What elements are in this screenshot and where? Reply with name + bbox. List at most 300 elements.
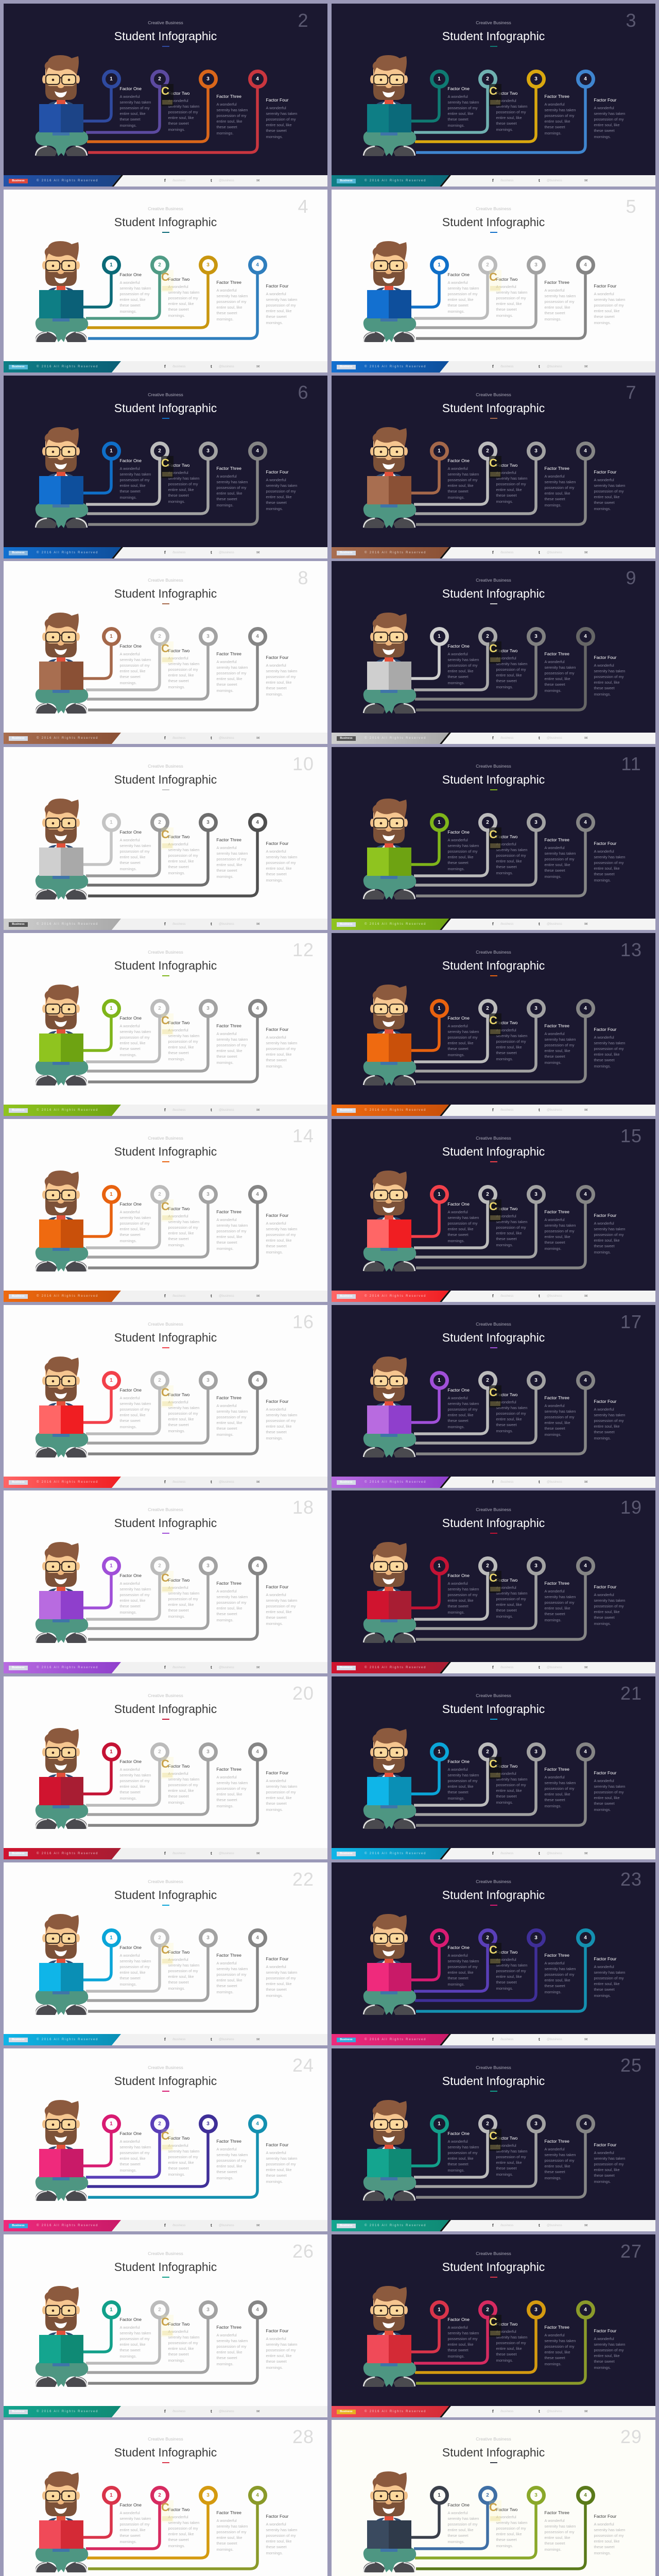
- footer bar: © 2016 All Rights Reserved: [37, 2410, 98, 2413]
- factor 3: 3: [206, 1749, 210, 1755]
- page number: 22: [292, 1869, 314, 1890]
- footer bar: ✉: [256, 1480, 260, 1484]
- kicker: Creative Business: [476, 1136, 511, 1141]
- footer bar: /business: [172, 2410, 185, 2413]
- factor 3: 3: [534, 1935, 537, 1940]
- factor 1: 1: [110, 819, 113, 825]
- footer bar: f: [492, 1665, 494, 1670]
- factor 2: 2: [486, 262, 489, 268]
- factor 2: [150, 1556, 204, 1628]
- factor 1: A wonderful serenity has taken possession of my entire soul, like these sweet mornings.: [119, 1581, 151, 1615]
- watermark: [161, 2129, 174, 2151]
- factor 3: [526, 998, 581, 1071]
- factor 3: 3: [534, 2307, 537, 2312]
- factor 2: [150, 813, 204, 885]
- page number: 2: [298, 10, 309, 31]
- kicker: Creative Business: [476, 950, 511, 955]
- factor 4: 4: [584, 448, 587, 453]
- footer bar: f: [164, 736, 166, 740]
- title: Student Infographic: [442, 773, 545, 786]
- factor 2: [150, 998, 204, 1071]
- page number: 7: [626, 382, 637, 403]
- factor 4: A wonderful serenity has taken possession of my entire soul, like these sweet mornings.: [266, 105, 297, 139]
- footer bar: f: [164, 178, 166, 183]
- kicker: Creative Business: [476, 764, 511, 769]
- title: Student Infographic: [442, 215, 545, 229]
- watermark: [489, 1013, 501, 1036]
- student figure and connector lines: [362, 55, 587, 156]
- factor 2: [478, 1370, 532, 1443]
- footer bar: t: [211, 1665, 212, 1670]
- footer bar: t: [211, 736, 212, 740]
- factor 4: Factor Four: [266, 283, 288, 289]
- factor 1: A wonderful serenity has taken possession of my entire soul, like these sweet mornings.: [119, 1023, 151, 1057]
- factor 3: A wonderful serenity has taken possession of my entire soul, like these sweet mornings.: [545, 845, 576, 879]
- footer bar: ✉: [256, 2037, 260, 2042]
- footer bar: ✉: [584, 922, 588, 926]
- footer bar: Business: [340, 2038, 353, 2041]
- footer bar: /business: [172, 2038, 185, 2041]
- factor 1: A wonderful serenity has taken possession of my entire soul, like these sweet mornings.: [448, 1210, 479, 1243]
- factor 1: 1: [110, 448, 113, 453]
- footer bar: f: [492, 1108, 494, 1112]
- factor 2: A wonderful serenity has taken possession of my entire soul, like these sweet mornings.: [496, 2514, 527, 2548]
- footer bar: © 2016 All Rights Reserved: [37, 1481, 98, 1484]
- footer bar: f: [164, 1665, 166, 1670]
- watermark: C: [489, 456, 497, 469]
- factor 3: A wonderful serenity has taken possession of my entire soul, like these sweet mornings.: [545, 1031, 576, 1065]
- footer bar: t: [539, 2223, 540, 2228]
- factor 4: A wonderful serenity has taken possession of my entire soul, like these sweet mornings.: [594, 105, 625, 139]
- factor 3: Factor Three: [216, 466, 241, 471]
- factor 2: A wonderful serenity has taken possession of my entire soul, like these sweet mornings.: [168, 1957, 199, 1991]
- factor 4: 4: [584, 1378, 587, 1383]
- factor 4: Factor Four: [594, 2328, 616, 2333]
- footer bar: Business: [340, 1109, 353, 1112]
- student figure and connector lines: [4, 2234, 327, 2417]
- footer bar: © 2016 All Rights Reserved: [365, 1852, 426, 1855]
- factor 2: A wonderful serenity has taken possession of my entire soul, like these sweet mornings.: [496, 2329, 527, 2363]
- footer bar: t: [211, 1480, 212, 1484]
- factor 3: [199, 1556, 252, 1628]
- factor 2: Factor Two: [168, 1206, 189, 1211]
- factor 3: 3: [206, 2121, 210, 2127]
- factor 4: 4: [584, 1749, 587, 1755]
- factor 1: 1: [110, 1749, 113, 1755]
- factor 4: A wonderful serenity has taken possession of my entire soul, like these sweet mornings.: [266, 1964, 297, 1998]
- title: Student Infographic: [442, 1888, 545, 1902]
- factor 4: 4: [256, 1191, 259, 1197]
- slide 16: [4, 1305, 327, 1488]
- footer bar: @business: [547, 365, 562, 368]
- factor 1: 1: [438, 1749, 441, 1755]
- footer bar: t: [211, 1108, 212, 1112]
- footer bar: f: [164, 1851, 166, 1856]
- title: Student Infographic: [114, 215, 217, 229]
- footer bar: Business: [340, 1852, 353, 1855]
- factor 4: 4: [584, 1935, 587, 1940]
- slide 4: [4, 190, 327, 372]
- factor 2: 2: [486, 2493, 489, 2498]
- student figure and connector lines: [4, 1119, 327, 1302]
- factor 2: Factor Two: [168, 463, 189, 468]
- footer bar: /business: [172, 1666, 185, 1669]
- factor 3: A wonderful serenity has taken possession of my entire soul, like these sweet mornings.: [216, 2333, 248, 2366]
- footer bar: [332, 2034, 655, 2045]
- factor 3: Factor Three: [545, 94, 569, 99]
- factor 3: A wonderful serenity has taken possession of my entire soul, like these sweet mornings.: [216, 659, 248, 693]
- factor 4: 4: [256, 1563, 259, 1568]
- factor 2: Factor Two: [168, 1392, 189, 1397]
- factor 3: 3: [206, 1563, 210, 1568]
- factor 3: A wonderful serenity has taken possession of my entire soul, like these sweet mornings.: [216, 102, 248, 135]
- factor 3: [199, 813, 252, 885]
- factor 3: A wonderful serenity has taken possession of my entire soul, like these sweet mornings.: [545, 2333, 576, 2366]
- factor 2: [478, 813, 532, 885]
- footer bar: ✉: [256, 178, 260, 183]
- watermark: C: [161, 1014, 169, 1027]
- slide 25: [332, 2048, 655, 2231]
- factor 1: [429, 2114, 484, 2187]
- factor 2: Factor Two: [496, 2135, 517, 2140]
- factor 1: A wonderful serenity has taken possession of my entire soul, like these sweet mornings.: [119, 466, 151, 500]
- footer bar: © 2016 All Rights Reserved: [365, 2038, 426, 2041]
- factor 1: A wonderful serenity has taken possession of my entire soul, like these sweet mornings.: [448, 94, 479, 128]
- factor 1: [429, 2300, 484, 2372]
- slide 17: [332, 1305, 655, 1488]
- factor 3: A wonderful serenity has taken possession of my entire soul, like these sweet mornings.: [216, 1774, 248, 1808]
- factor 2: 2: [486, 2307, 489, 2312]
- watermark: C: [161, 456, 169, 469]
- factor 4: [576, 442, 625, 511]
- factor 1: [102, 813, 155, 885]
- kicker: Creative Business: [476, 1321, 511, 1327]
- factor 2: Factor Two: [496, 2321, 517, 2327]
- factor 4: [248, 1928, 302, 2000]
- footer bar: /business: [500, 2224, 513, 2227]
- slide 2: [4, 4, 327, 187]
- factor 1: A wonderful serenity has taken possession of my entire soul, like these sweet mornings.: [119, 1395, 151, 1429]
- factor 4: [248, 2300, 302, 2372]
- kicker: Creative Business: [148, 1507, 183, 1512]
- factor 1: Factor One: [119, 2316, 142, 2321]
- factor 2: 2: [158, 76, 161, 81]
- footer bar: @business: [219, 2410, 234, 2413]
- factor 3: [199, 442, 248, 507]
- title: Student Infographic: [114, 773, 217, 786]
- title: Student Infographic: [442, 1702, 545, 1716]
- student figure and connector lines: [332, 747, 655, 930]
- factor 3: [199, 2114, 252, 2187]
- factor 4: [576, 627, 625, 697]
- factor 2: [478, 998, 532, 1071]
- factor 1: [429, 1185, 484, 1257]
- factor 4: 4: [584, 2307, 587, 2312]
- factor 3: Factor Three: [216, 2138, 241, 2143]
- footer bar: f: [164, 550, 166, 555]
- factor 2: 2: [486, 1378, 489, 1383]
- footer bar: © 2016 All Rights Reserved: [365, 365, 426, 368]
- factor 3: A wonderful serenity has taken possession of my entire soul, like these sweet mornings.: [545, 1589, 576, 1622]
- footer bar: Business: [340, 2410, 353, 2413]
- factor 2: [150, 1185, 204, 1257]
- footer bar: [4, 1662, 327, 1673]
- footer bar: ✉: [256, 1851, 260, 1856]
- footer bar: ✉: [584, 2037, 588, 2042]
- watermark: [161, 641, 174, 664]
- factor 1: Factor One: [448, 643, 470, 648]
- factor 1: A wonderful serenity has taken possession of my entire soul, like these sweet mornings.: [119, 1953, 151, 1987]
- factor 4: A wonderful serenity has taken possession of my entire soul, like these sweet mornings.: [266, 1592, 297, 1626]
- factor 1: Factor One: [119, 1015, 142, 1020]
- slide 18: [4, 1490, 327, 1673]
- footer bar: ✉: [256, 550, 260, 555]
- footer bar: t: [211, 2409, 212, 2414]
- slide 7: [332, 376, 655, 558]
- factor 2: [150, 256, 199, 318]
- footer bar: f: [164, 1108, 166, 1112]
- footer bar: [4, 2406, 327, 2417]
- factor 3: 3: [206, 76, 210, 81]
- factor 2: A wonderful serenity has taken possession of my entire soul, like these sweet mornings.: [168, 98, 199, 132]
- factor 2: A wonderful serenity has taken possession of my entire soul, like these sweet mornings.: [496, 1957, 527, 1991]
- factor 1: [430, 256, 479, 314]
- page number: 14: [292, 1125, 314, 1146]
- factor 4: Factor Four: [266, 654, 288, 659]
- kicker: Creative Business: [148, 206, 183, 211]
- footer bar: ✉: [256, 364, 260, 369]
- factor 2: Factor Two: [496, 276, 517, 281]
- factor 2: A wonderful serenity has taken possession of my entire soul, like these sweet mornings.: [496, 470, 527, 504]
- watermark: [489, 641, 501, 664]
- student figure and connector lines: [362, 613, 587, 714]
- footer bar: t: [539, 1851, 540, 1856]
- factor 4: Factor Four: [594, 97, 616, 102]
- title: Student Infographic: [114, 2260, 217, 2274]
- footer bar: f: [492, 178, 494, 183]
- factor 2: Factor Two: [496, 1020, 517, 1025]
- student figure and connector lines: [332, 1119, 655, 1302]
- watermark: [161, 270, 174, 292]
- slide 6: [4, 376, 327, 558]
- factor 3: Factor Three: [216, 2325, 241, 2330]
- footer bar: [4, 1848, 327, 1859]
- factor 2: Factor Two: [168, 834, 189, 839]
- footer bar: ✉: [584, 364, 588, 369]
- factor 4: A wonderful serenity has taken possession of my entire soul, like these sweet mornings.: [266, 2521, 297, 2555]
- footer bar: @business: [219, 179, 234, 182]
- footer bar: @business: [547, 551, 562, 554]
- footer bar: Business: [340, 551, 353, 554]
- footer bar: © 2016 All Rights Reserved: [37, 1295, 98, 1298]
- factor 2: A wonderful serenity has taken possession of my entire soul, like these sweet mornings.: [168, 284, 199, 318]
- factor 4: [248, 70, 297, 139]
- footer bar: © 2016 All Rights Reserved: [37, 179, 98, 182]
- factor 3: A wonderful serenity has taken possession of my entire soul, like these sweet mornings.: [545, 2518, 576, 2552]
- footer bar: /business: [172, 1109, 185, 1112]
- page number: 26: [292, 2241, 314, 2262]
- factor 3: Factor Three: [216, 1395, 241, 1400]
- factor 4: A wonderful serenity has taken possession of my entire soul, like these sweet mornings.: [594, 1964, 625, 1998]
- student figure and connector lines: [4, 1305, 327, 1488]
- slide 29: [332, 2420, 655, 2576]
- page number: 23: [620, 1869, 642, 1890]
- footer bar: f: [492, 1480, 494, 1484]
- factor 4: Factor Four: [266, 1770, 288, 1775]
- factor 4: [576, 1742, 630, 1815]
- factor 2: A wonderful serenity has taken possession of my entire soul, like these sweet mornings.: [496, 2143, 527, 2177]
- factor 1: A wonderful serenity has taken possession of my entire soul, like these sweet mornings.: [448, 1767, 479, 1801]
- factor 1: [429, 813, 484, 885]
- title: Student Infographic: [114, 959, 217, 972]
- factor 1: A wonderful serenity has taken possession of my entire soul, like these sweet mornings.: [448, 1023, 479, 1057]
- factor 4: A wonderful serenity has taken possession of my entire soul, like these sweet mornings.: [266, 849, 297, 883]
- factor 1: [102, 627, 151, 685]
- factor 3: 3: [206, 2307, 210, 2312]
- factor 2: Factor Two: [496, 463, 517, 468]
- factor 3: [526, 1742, 581, 1815]
- factor 2: A wonderful serenity has taken possession of my entire soul, like these sweet mornings.: [496, 1585, 527, 1619]
- footer bar: @business: [547, 2410, 562, 2413]
- factor 1: Factor One: [119, 457, 142, 463]
- factor 3: 3: [534, 1378, 537, 1383]
- footer bar: @business: [547, 1481, 562, 1484]
- factor 1: A wonderful serenity has taken possession of my entire soul, like these sweet mornings.: [448, 280, 479, 314]
- factor 1: [429, 1928, 484, 2000]
- factor 2: [150, 2485, 204, 2557]
- footer bar: /business: [172, 179, 185, 182]
- factor 3: 3: [206, 262, 210, 268]
- slide 13: [332, 933, 655, 1116]
- factor 3: [199, 998, 252, 1071]
- page number: 18: [292, 1497, 314, 1518]
- footer bar: /business: [500, 551, 513, 554]
- factor 2: Factor Two: [168, 2507, 189, 2512]
- watermark: [489, 84, 501, 106]
- factor 3: [199, 627, 248, 693]
- footer bar: Business: [12, 179, 25, 182]
- factor 3: 3: [534, 1006, 537, 1011]
- footer bar: f: [492, 1294, 494, 1298]
- factor 4: Factor Four: [266, 1026, 288, 1031]
- footer bar: /business: [172, 2224, 185, 2227]
- watermark: [161, 2315, 174, 2337]
- footer bar: @business: [219, 1852, 234, 1855]
- factor 4: 4: [584, 262, 587, 268]
- slide 11: [332, 747, 655, 930]
- factor 2: [478, 627, 527, 689]
- factor 2: A wonderful serenity has taken possession of my entire soul, like these sweet mornings.: [168, 2143, 199, 2177]
- watermark: [161, 1385, 174, 1408]
- page number: 16: [292, 1311, 314, 1332]
- footer bar: [332, 1477, 655, 1488]
- factor 1: Factor One: [119, 2131, 142, 2136]
- watermark: [161, 1757, 174, 1779]
- factor 3: [199, 1928, 252, 2000]
- page number: 13: [620, 939, 642, 960]
- factor 4: Factor Four: [594, 283, 616, 289]
- footer bar: t: [539, 550, 540, 555]
- footer bar: [4, 919, 327, 930]
- footer bar: @business: [547, 1852, 562, 1855]
- watermark: C: [161, 2315, 169, 2328]
- factor 4: Factor Four: [594, 1584, 616, 1589]
- title: Student Infographic: [442, 1331, 545, 1344]
- factor 1: 1: [110, 1378, 113, 1383]
- factor 1: Factor One: [448, 2316, 470, 2321]
- factor 3: [526, 2485, 581, 2557]
- factor 4: Factor Four: [594, 2142, 616, 2147]
- factor 2: [150, 627, 199, 689]
- factor 3: [199, 70, 248, 135]
- factor 4: 4: [256, 2121, 259, 2127]
- student figure and connector lines: [35, 55, 259, 156]
- footer bar: ✉: [584, 178, 588, 183]
- factor 4: A wonderful serenity has taken possession of my entire soul, like these sweet mornings.: [594, 2336, 625, 2370]
- page number: 19: [620, 1497, 642, 1518]
- factor 1: 1: [438, 1006, 441, 1011]
- footer bar: f: [492, 2409, 494, 2414]
- factor 4: 4: [584, 2121, 587, 2127]
- watermark: [161, 84, 174, 106]
- footer bar: [332, 547, 655, 558]
- factor 2: A wonderful serenity has taken possession of my entire soul, like these sweet mornings.: [168, 655, 199, 689]
- factor 2: 2: [486, 1191, 489, 1197]
- factor 4: [248, 256, 297, 325]
- factor 1: Factor One: [448, 1759, 470, 1764]
- footer bar: © 2016 All Rights Reserved: [365, 2224, 426, 2227]
- footer bar: Business: [12, 1295, 25, 1298]
- factor 1: [429, 1742, 484, 1815]
- watermark: [489, 2315, 501, 2337]
- factor 3: A wonderful serenity has taken possession of my entire soul, like these sweet mornings.: [545, 102, 576, 135]
- footer bar: /business: [172, 1295, 185, 1298]
- footer bar: [332, 175, 655, 187]
- factor 3: Factor Three: [545, 837, 569, 842]
- factor 3: 3: [534, 2493, 537, 2498]
- factor 2: 2: [486, 634, 489, 639]
- factor 1: 1: [438, 2307, 441, 2312]
- watermark: [161, 1571, 174, 1593]
- factor 2: Factor Two: [168, 648, 189, 653]
- footer bar: [332, 1848, 655, 1859]
- factor 4: Factor Four: [594, 654, 616, 659]
- factor 3: [199, 256, 248, 321]
- footer bar: ✉: [584, 550, 588, 555]
- footer bar: @business: [219, 2224, 234, 2227]
- factor 2: [478, 1185, 532, 1257]
- factor 1: 1: [438, 2493, 441, 2498]
- footer bar: f: [164, 1480, 166, 1484]
- footer bar: ✉: [256, 2223, 260, 2228]
- slide 24: [4, 2048, 327, 2231]
- footer bar: t: [539, 178, 540, 183]
- footer bar: f: [492, 736, 494, 740]
- title: Student Infographic: [442, 401, 545, 415]
- student figure and connector lines: [332, 1862, 655, 2045]
- factor 3: [527, 627, 576, 693]
- watermark: C: [161, 1943, 169, 1956]
- factor 3: 3: [206, 1378, 210, 1383]
- slide 3: [332, 4, 655, 187]
- factor 4: [576, 256, 625, 325]
- student figure and connector lines: [332, 1676, 655, 1859]
- slide 14: [4, 1119, 327, 1302]
- factor 4: 4: [584, 634, 587, 639]
- footer bar: ✉: [584, 1480, 588, 1484]
- footer bar: t: [539, 364, 540, 369]
- factor 1: Factor One: [119, 2502, 142, 2507]
